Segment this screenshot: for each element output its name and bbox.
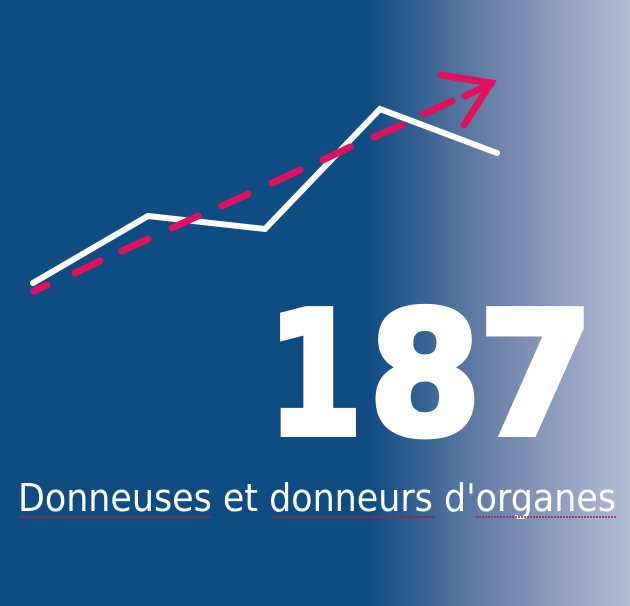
spellcheck underlines [19, 516, 435, 518]
big number [268, 276, 594, 474]
line chart: white trend line [33, 109, 497, 283]
big number: 1 [268, 276, 362, 474]
big number: 8 [369, 276, 481, 474]
dashed pink arrow [34, 75, 491, 291]
big number: 7 [478, 276, 594, 474]
